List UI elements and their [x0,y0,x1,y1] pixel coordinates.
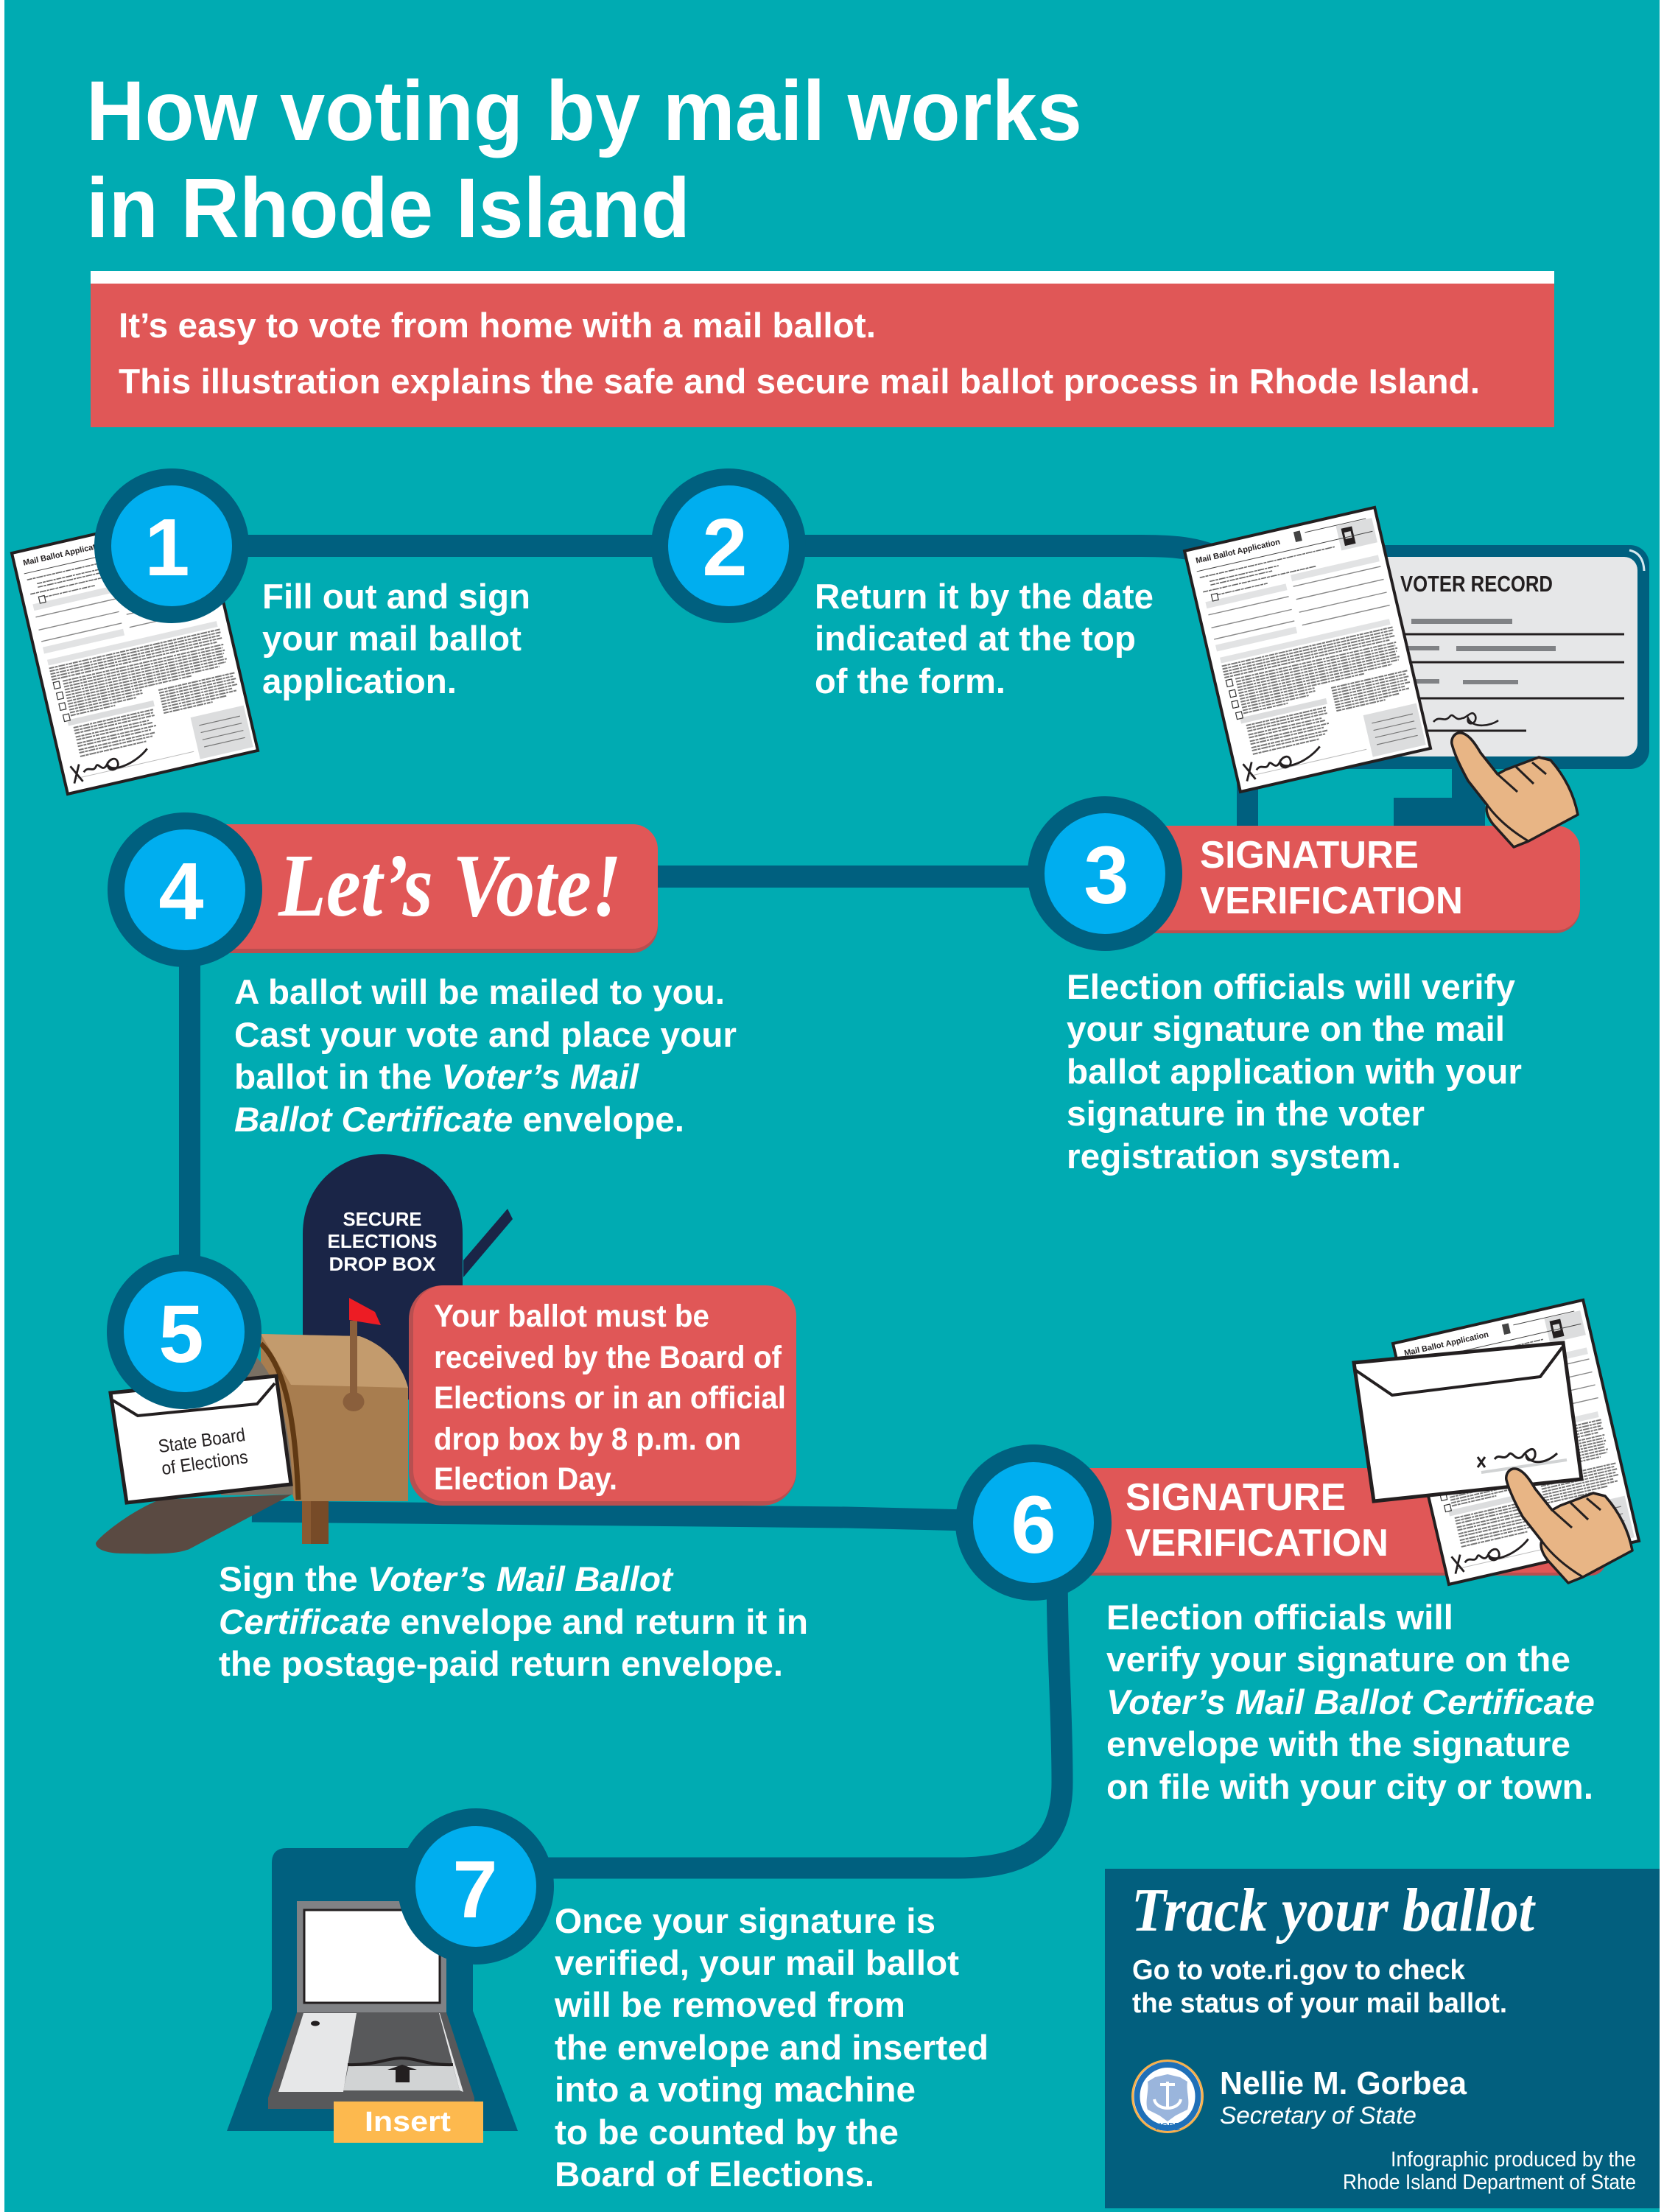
heading: track your ballot: Track your ballot [1131,1876,1536,1945]
step 1 number: 1 [144,502,190,593]
step 5 text [219,1559,808,1683]
connector path: steps 4 to 3 [648,866,1046,888]
insert label: Insert [365,2107,451,2138]
step 2 text: Return it by the date [815,577,1154,616]
step 1 text: your mail ballot [262,619,522,658]
step 4 text: ballot in the Voter’s Mail [234,1057,639,1096]
step 7 text: verified, your mail ballot [555,1943,959,1982]
step 4 text: Cast your vote and place your [234,1015,737,1054]
official name [1220,2065,1467,2129]
connector path: steps 4 to 5 [179,958,200,1274]
step 4 number: 4 [158,846,204,937]
step 1 text: application. [262,661,457,701]
callout: ballot deadline: Election Day. [434,1461,617,1497]
illustration: application form held to monitor [1184,508,1430,792]
step 7 text: the envelope and inserted [555,2028,989,2067]
step 3 text: registration system. [1067,1137,1401,1176]
illustration: application form held to monitor: Mail Ballot Application [1195,538,1281,566]
step 7 text: into a voting machine [555,2070,916,2109]
step 6 banner: VERIFICATION [1126,1522,1389,1565]
step 3 text: ballot application with your [1067,1052,1522,1091]
step 7 text: Board of Elections. [555,2155,874,2194]
step 4 banner: Let's Vote [192,824,658,953]
connector path: steps 6 to 7 [479,1562,1062,1868]
illustration: signed certificate envelope [1354,1343,1582,1501]
illustration: application form behind envelope: Mail Ballot Application [1403,1330,1489,1358]
step 3 text: Election officials will verify [1067,967,1515,1006]
step 6 text [1106,1598,1595,1806]
step 3 hand pointing at signature [1452,733,1578,847]
step 4 text: Ballot Certificate envelope. [234,1100,684,1139]
title [86,64,1082,256]
step 3 banner [1105,826,1580,933]
step 6 hand pointing at signature [1506,1469,1632,1583]
step 2 number [660,477,797,614]
illustration: voting machine [227,1848,518,2131]
callout: ballot deadline: received by the Board of [434,1340,782,1375]
step 5 text: Certificate envelope and return it in [219,1602,808,1641]
tracking instructions: the status of your mail ballot. [1132,1988,1507,2019]
step 6 text: on file with your city or town. [1106,1767,1593,1806]
step 5 number: 5 [158,1289,204,1380]
illustration: completed application form: Mail Ballot Application [22,540,108,568]
step 5 text: the postage-paid return envelope. [219,1644,783,1683]
illustration: mailbox [96,1298,408,1553]
callout: ballot deadline: Your ballot must be [434,1299,709,1334]
step 7 text: Once your signature is [555,1901,935,1940]
step 6 number: 6 [1011,1480,1056,1570]
step 2 number: 2 [702,502,748,593]
illustration: secure drop box: ELECTIONS [327,1230,438,1252]
illustration: envelope addressed to State Board of Elections [110,1376,291,1503]
illustration: envelope addressed to State Board of Elections: of Elections [161,1447,249,1479]
tracking instructions: Go to vote.ri.gov to check [1132,1955,1466,1986]
step 6 text: verify your signature on the [1106,1640,1570,1679]
step 6 banner [1039,1468,1606,1576]
step 4 banner: Let's Vote: Let’s Vote! [278,836,622,935]
step 3 text: your signature on the mail [1067,1009,1505,1048]
step 6 text: Election officials will [1106,1598,1453,1637]
step 7 text [554,1901,989,2194]
official name: Secretary of State [1220,2102,1417,2129]
title: in Rhode Island [86,161,690,256]
intro banner [91,271,1554,427]
illustration: voter record monitor [1237,545,1649,829]
step 6 number [964,1453,1103,1592]
illustration: secure drop box [303,1154,513,1400]
credit [1343,2148,1636,2194]
step 2 text [815,577,1154,701]
illustration: envelope addressed to State Board of Elections: State Board [157,1425,247,1457]
step 7 text: will be removed from [554,1985,905,2024]
step 4 number [116,821,253,959]
step 3 text [1067,967,1522,1176]
title: How voting by mail works [86,64,1082,158]
intro banner: It’s easy to vote from home with a mail ballot. [119,306,876,345]
official name: Nellie M. Gorbea [1220,2065,1467,2102]
credit: Infographic produced by the [1391,2148,1636,2171]
illustration: completed application form [12,510,258,794]
callout: ballot deadline: drop box by 8 p.m. on [434,1422,741,1457]
step 5 text: Sign the Voter’s Mail Ballot [219,1559,674,1598]
step 1 text [262,577,530,701]
credit: Rhode Island Department of State [1343,2171,1636,2194]
callout: ballot deadline [409,1285,796,1506]
step 4 text: A ballot will be mailed to you. [234,972,725,1011]
step 4 text [234,972,737,1139]
tracking instructions [1132,1955,1507,2019]
step 7 number: 7 [452,1844,498,1935]
insert label [334,2102,483,2143]
illustration: voter record monitor: VOTER RECORD [1400,571,1553,597]
step 7 text: to be counted by the [555,2113,899,2152]
icon: state seal [1133,2061,1202,2133]
step 7 number [407,1817,545,1956]
step 1 number [103,477,240,614]
step 1 text: Fill out and sign [262,577,530,616]
callout: ballot deadline: Elections or in an official [434,1380,786,1416]
illustration: application form behind envelope [1393,1300,1639,1584]
illustration: secure drop box: DROP BOX [329,1253,436,1275]
step 3 text: signature in the voter [1067,1094,1425,1133]
step 2 text: indicated at the top [815,619,1136,658]
step 6 banner: SIGNATURE [1126,1476,1346,1519]
step 3 number: 3 [1084,830,1129,921]
illustration: secure drop box: SECURE [343,1208,421,1230]
step 2 text: of the form. [815,661,1005,701]
step 6 text: envelope with the signature [1106,1724,1570,1763]
step 6 text: Voter’s Mail Ballot Certificate [1106,1682,1595,1721]
step 3 number [1036,804,1174,943]
step 3 banner: SIGNATURE [1200,834,1419,877]
panel: track your ballot [1105,1869,1660,2208]
step 5 number [115,1263,253,1401]
step 3 banner: VERIFICATION [1200,879,1463,922]
intro banner: This illustration explains the safe and secure mail ballot process in Rhode Island. [119,362,1480,401]
connector path: steps 1 to 3 [171,546,1223,560]
connector path: steps 5 to 6 [252,1511,1031,1522]
icon: state seal: HOPE [1155,2121,1180,2133]
